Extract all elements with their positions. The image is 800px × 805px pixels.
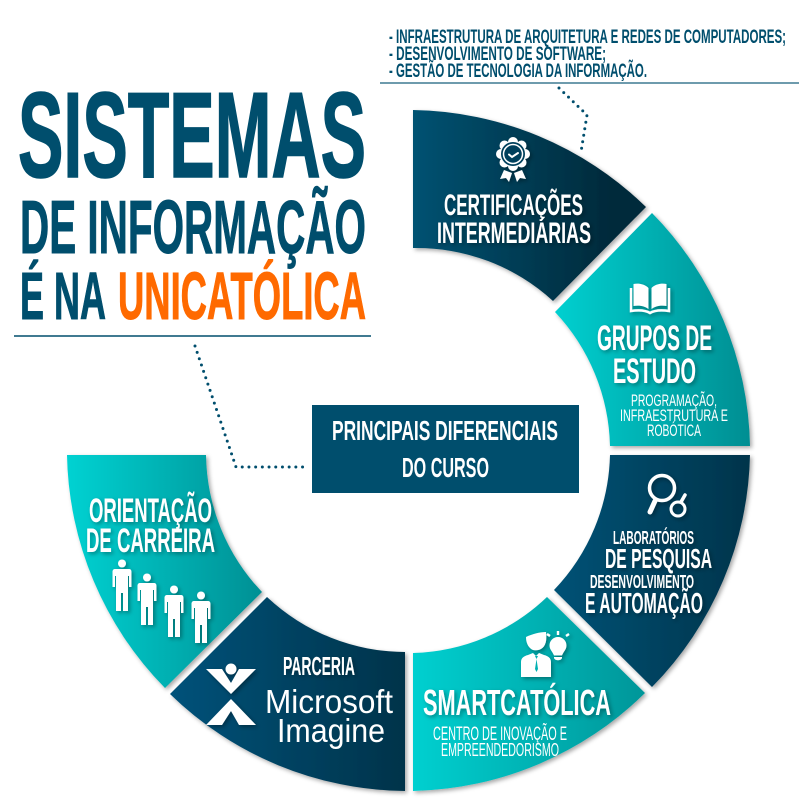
title xyxy=(18,67,366,334)
icon: open book xyxy=(631,284,669,313)
title: É NA xyxy=(20,259,106,334)
panel: orientacao de carreira xyxy=(67,455,262,688)
panel: orientacao de carreira: ORIENTAÇÃO xyxy=(89,492,212,530)
title: DE INFORMAÇÃO xyxy=(20,185,366,269)
panel: laboratorios de pesquisa: E AUTOMAÇÃO xyxy=(585,588,703,620)
panel: smartcatolica: EMPREENDEDORISMO xyxy=(441,740,559,760)
icon: badge xyxy=(496,137,530,182)
text block: certification topics: - DESENVOLVIMENTO DE SOFTWARE; xyxy=(389,43,606,65)
panel: smartcatolica: SMARTCATÓLICA xyxy=(423,681,611,723)
panel: grupos de estudo: INFRAESTRUTURA E xyxy=(620,407,728,425)
panel: grupos de estudo: PROGRAMAÇÃO, xyxy=(631,390,717,410)
panel: orientacao de carreira: DE CARREIRA xyxy=(86,522,215,560)
panel: smartcatolica xyxy=(413,597,645,791)
panel: laboratorios de pesquisa: LABORATÓRIOS xyxy=(613,527,694,548)
text block: certification topics xyxy=(389,26,786,82)
icon: magnifiers xyxy=(650,476,685,516)
panel: grupos de estudo xyxy=(555,213,750,446)
panel: grupos de estudo: ESTUDO xyxy=(613,352,696,391)
panel: certificacoes intermediarias: INTERMEDIÁRIAS xyxy=(437,216,591,250)
icon: microsoft imagine logo xyxy=(206,664,256,725)
panel: smartcatolica: CENTRO DE INOVAÇÃO E xyxy=(433,723,567,745)
center box: DO CURSO xyxy=(402,452,489,483)
dotted connector: title to center box xyxy=(195,346,305,467)
panel: laboratorios de pesquisa xyxy=(554,455,750,687)
panel: parceria microsoft imagine: Microsoft xyxy=(265,684,394,721)
panel: parceria microsoft imagine xyxy=(170,597,405,791)
panel: certificacoes intermediarias xyxy=(413,110,646,301)
panel: laboratorios de pesquisa: DESENVOLVIMENTO xyxy=(590,572,694,592)
icon: four people xyxy=(112,560,210,643)
panel: parceria microsoft imagine: Imagine xyxy=(277,713,385,750)
icon: person with light bulb xyxy=(521,631,569,677)
panel: grupos de estudo: ROBÓTICA xyxy=(647,421,701,440)
panel: parceria microsoft imagine: PARCERIA xyxy=(283,653,355,681)
dotted connector: list to certifications xyxy=(559,88,587,152)
title: UNICATÓLICA xyxy=(118,259,366,334)
center box xyxy=(312,405,579,493)
panel: certificacoes intermediarias: CERTIFICAÇÕES xyxy=(444,188,583,222)
title: SISTEMAS xyxy=(18,67,366,203)
center box: PRINCIPAIS DIFERENCIAIS xyxy=(332,415,558,446)
panel: laboratorios de pesquisa: DE PESQUISA xyxy=(605,543,712,574)
